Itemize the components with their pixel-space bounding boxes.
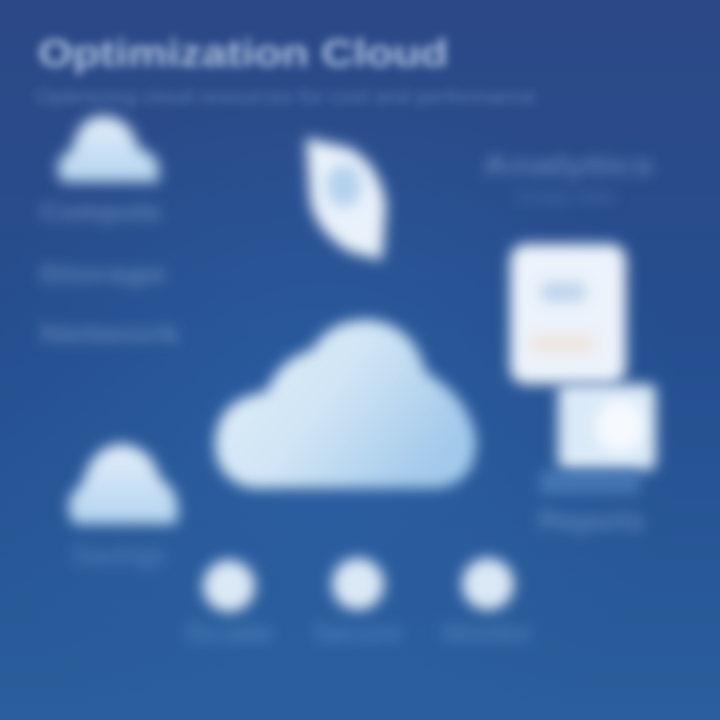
- node icon 1: [203, 560, 255, 612]
- node label 1: Scale: [184, 617, 274, 648]
- node 3: [442, 558, 532, 648]
- node label 3: Monitor: [442, 617, 532, 648]
- list item 3: Network: [40, 321, 181, 348]
- icon: report card: [510, 244, 626, 384]
- right text block: [482, 150, 654, 206]
- node 1: [184, 560, 274, 648]
- node label 2: Secure: [312, 617, 402, 648]
- icon: lower left cloud: [69, 444, 178, 524]
- title: Optimization Cloud: [38, 33, 448, 75]
- right caption: Usage data: [515, 189, 615, 206]
- right heading: Analytics: [482, 150, 654, 180]
- lower left caption: Savings: [72, 539, 166, 570]
- tile caption: [538, 470, 644, 536]
- caption text: Reports: [538, 505, 644, 536]
- icon: top left cloud: [58, 116, 159, 182]
- icon: top centre document: [306, 138, 386, 260]
- list item 2: Storage: [38, 261, 166, 288]
- icon: square tile: [558, 384, 656, 470]
- node 2: [312, 558, 402, 648]
- list item 1: Compute: [40, 199, 162, 226]
- central cloud: [215, 320, 476, 488]
- caption glow: [540, 470, 640, 494]
- subtitle: Optimizing cloud resources for cost and performance: [36, 87, 536, 107]
- node icon 3: [462, 558, 514, 610]
- left text list: [38, 199, 181, 348]
- node icon 2: [332, 558, 384, 610]
